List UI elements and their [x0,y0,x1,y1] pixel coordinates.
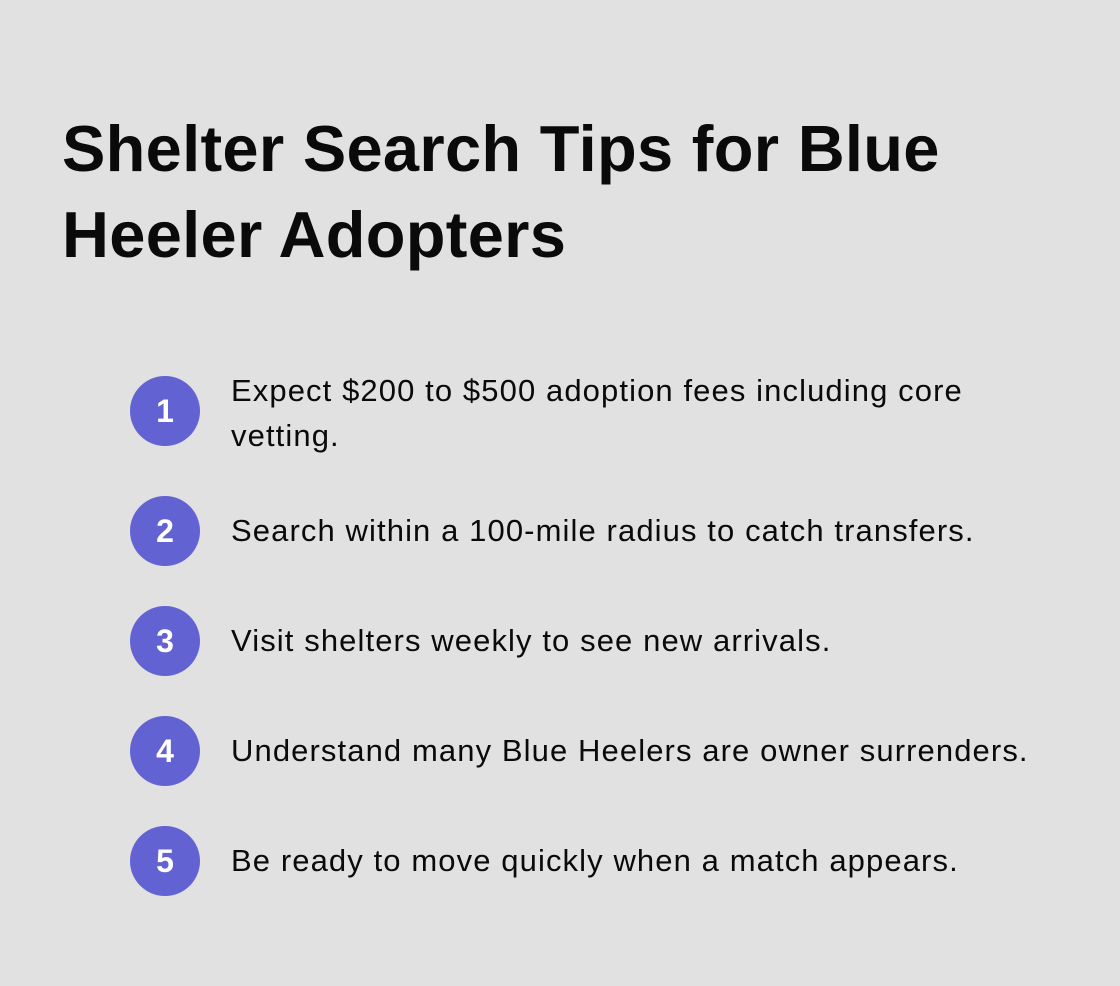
item 5: Be ready to move quickly when a match appears. [231,843,959,878]
item 5 [130,826,959,896]
item 3: 3 [156,623,174,659]
item 1: Expect $200 to $500 adoption fees including core [231,373,963,408]
title: Heeler Adopters [62,198,566,271]
item 5: 5 [156,843,174,879]
item 4 [130,716,1029,786]
title [62,112,940,271]
item 2: 2 [156,513,174,549]
item 2: Search within a 100-mile radius to catch transfers. [231,513,975,548]
item 3: Visit shelters weekly to see new arrivals. [231,623,831,658]
item 1 [130,373,963,453]
item 1: vetting. [231,418,340,453]
item 3 [130,606,831,676]
item 2 [130,496,975,566]
item 1: 1 [156,393,174,429]
title: Shelter Search Tips for Blue [62,112,940,185]
item 4: Understand many Blue Heelers are owner surrenders. [231,733,1029,768]
item 4: 4 [156,733,174,769]
